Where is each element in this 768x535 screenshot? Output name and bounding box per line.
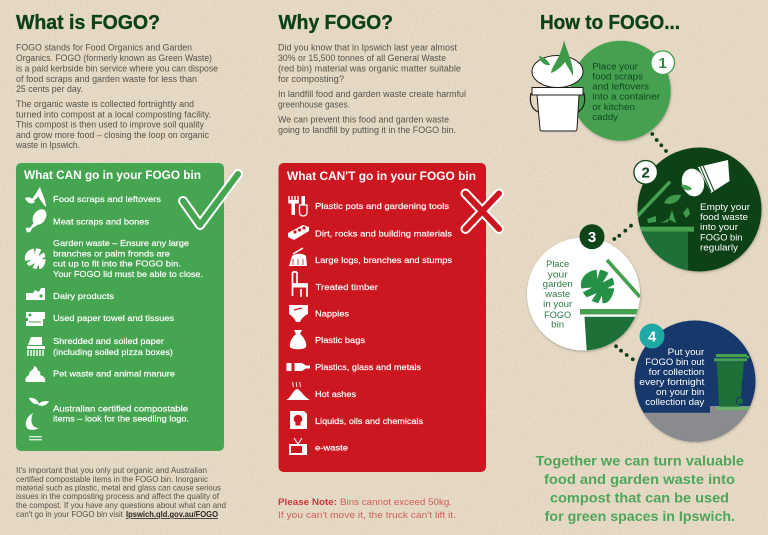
item: shredded paper: Shredded and soiled paper (53, 336, 164, 346)
item: e-waste (289, 438, 348, 455)
text block: Ipswich statistic: 30% or 15,500 tonnes of all General Waste (278, 53, 446, 63)
text block: Ipswich statistic: Did you know that in Ipswich last year almost (278, 42, 458, 52)
callout: please note: Bins cannot exceed 50kg. (340, 497, 452, 507)
text block: FOGO definition: 25 cents per day. (16, 84, 83, 94)
item: shredded paper: (including soiled pizza boxes) (53, 347, 173, 357)
heading: Why FOGO: Why FOGO? (278, 12, 393, 34)
icon: open bin with food falling (636, 182, 694, 274)
text block: prevention (278, 114, 456, 135)
item: pet waste (25, 366, 175, 382)
callout: please note (278, 497, 456, 520)
step 2 text: Empty your (700, 202, 750, 212)
item text: garden waste: branches or palm fronds are (53, 248, 170, 258)
item text: garden waste (53, 238, 203, 279)
text block: composting explanation: waste in Ipswich. (15, 140, 80, 150)
text block: important note with link: can't go in your FOGO bin visit (16, 510, 124, 519)
step 2 text: into your (700, 222, 738, 232)
item: dairy products: Dairy products (53, 291, 115, 301)
step 1 text: caddy (592, 112, 619, 122)
step 2 text: regularly (700, 242, 739, 252)
item: dirt, rocks, building materials: Dirt, rocks and building materials (315, 228, 453, 238)
step 1 text: into a container (592, 92, 660, 102)
step 4: put bin out for collection (630, 320, 760, 445)
icon: wheelie bin on kerb (644, 354, 750, 442)
column: What is FOGO (15, 12, 218, 150)
step 1: place food scraps in caddy (530, 40, 674, 141)
panel: what can go in your FOGO bin (16, 163, 238, 451)
callout: please note: Please Note: (278, 497, 337, 507)
step 3 text: in your (543, 299, 572, 309)
item: treated timber (292, 272, 378, 297)
item: food scraps (25, 187, 162, 207)
step 2 text: FOGO bin (700, 232, 742, 242)
step 1 text: or kitchen (592, 102, 635, 112)
step 3 text: garden (543, 279, 573, 289)
item: plastic bags: Plastic bags (315, 335, 366, 345)
item: plastic pots and tools (288, 196, 450, 216)
step 1 text: and leftovers (592, 82, 650, 92)
step 3 text: your (548, 270, 568, 280)
dotted connector 3 to 4 (614, 344, 635, 361)
text block: important note with link: issues in the composting process and affect the quality of (16, 492, 220, 501)
text block: greenhouse gases (278, 89, 466, 110)
item: e-waste: e-waste (315, 442, 348, 452)
closing message: food and garden waste into (544, 472, 735, 487)
text block: composting explanation: turned into compost at a local composting facility. (16, 110, 211, 120)
step 1 text (592, 62, 660, 122)
item text: garden waste: Your FOGO lid must be able to close. (53, 269, 203, 279)
step 3 text: waste (544, 289, 570, 299)
text block: composting explanation: This compost is then used to improve soil quality (16, 120, 205, 130)
text block: important note with link (16, 466, 226, 519)
item: food scraps: Food scraps and leftovers (53, 194, 162, 204)
closing message (536, 454, 744, 524)
item: compostable seedling logo: Australian certified compostable (53, 404, 188, 414)
icon: kitchen caddy with food (530, 40, 585, 131)
item: compostable seedling logo (26, 398, 189, 440)
item: plastic bags (290, 330, 366, 349)
step 3 text: Place (546, 259, 569, 269)
item: liquids, oils, chemicals (290, 411, 424, 429)
step 2: empty food waste into bin (634, 148, 762, 274)
item: garden waste icon (22, 244, 50, 273)
icon: large tick (183, 174, 238, 225)
text block: FOGO definition: is a paid kerbside bin service where you can dispose (16, 64, 218, 74)
dotted connector 1 to 2 (650, 132, 668, 153)
item: meat scraps (26, 207, 150, 232)
item: dirt, rocks, building materials (288, 225, 453, 240)
step 4 text: every fortnight (639, 377, 705, 387)
panel: what can't go in your FOGO bin (278, 163, 499, 472)
badge: number 1: 1 (659, 55, 667, 72)
item text: garden waste: Garden waste – Ensure any large (53, 238, 189, 248)
item: paper towel (26, 312, 175, 326)
item: nappies (289, 305, 350, 322)
text block: FOGO definition: Organics. FOGO (formerly known as Green Waste) (16, 53, 212, 63)
step 4 text: on your bin (656, 387, 704, 397)
icon: large cross (466, 194, 499, 229)
item: liquids, oils, chemicals: Liquids, oils and chemicals (315, 416, 424, 426)
step 4 text: for collection (649, 367, 704, 377)
text block: FOGO definition: of food scraps and garden waste for less than (16, 74, 197, 84)
step 3 text (543, 259, 573, 330)
item: dairy products (26, 288, 115, 301)
heading: How to FOGO: How to FOGO... (540, 12, 680, 34)
text block: composting explanation: The organic waste is collected fortnightly and (16, 99, 194, 109)
item: pet waste: Pet waste and animal manure (53, 368, 175, 378)
step 3 text: bin (551, 320, 564, 330)
text block: composting explanation (15, 99, 211, 150)
text block: important note with link: certified compostable items in the FOGO bin. Inorganic (16, 475, 208, 484)
dotted connector 2 to 3 (612, 224, 633, 241)
item: hot ashes: Hot ashes (315, 389, 357, 399)
item: meat scraps: Meat scraps and bones (53, 216, 150, 226)
item: large logs (289, 248, 453, 266)
text block: prevention: We can prevent this food and garden waste (278, 114, 449, 124)
panel heading: what can't go: What CAN'T go in your FOGO bin (287, 169, 476, 183)
step 4 text (639, 347, 705, 407)
badge: number 3: 3 (588, 229, 596, 246)
step 2 text: food waste (700, 212, 748, 222)
text block: Ipswich statistic: (red bin) material was organic matter suitable (278, 64, 461, 74)
text block: prevention: going to landfill by putting it in the FOGO bin. (278, 125, 456, 135)
step 3 text: FOGO (544, 310, 571, 320)
callout: please note: If you can't move it, the truck can't lift it. (278, 510, 456, 520)
text block: important note with link: Ipswich.qld.gov.au/FOGO (126, 510, 219, 519)
text block: FOGO definition (16, 42, 218, 94)
closing message: for green spaces in Ipswich. (545, 509, 735, 524)
text block: Ipswich statistic (278, 42, 461, 84)
item: nappies: Nappies (315, 308, 350, 318)
step 1 text: food scraps (592, 72, 644, 82)
text block: important note with link: material such as plastic, metal and glass can cause serious (16, 484, 221, 492)
icon: bin with monstera leaf (580, 258, 640, 350)
item: large logs: Large logs, branches and stumps (315, 255, 453, 265)
closing message: compost that can be used (550, 490, 729, 505)
item: shredded paper (27, 336, 173, 357)
text block: composting explanation: and grow more food – closing the loop on organic (16, 130, 210, 140)
text block: important note with link: It's important that you only put organic and Australian (16, 466, 207, 475)
panel heading: what can go: What CAN go in your FOGO bin (24, 168, 201, 182)
step 2 text (700, 202, 750, 252)
item: hot ashes (286, 382, 357, 400)
step 4 text: FOGO bin out (645, 357, 705, 367)
heading: What is FOGO: What is FOGO? (16, 12, 160, 34)
item: plastic pots and tools: Plastic pots and gardening tools (315, 201, 450, 211)
column: Why FOGO (278, 12, 466, 135)
badge: number 4: 4 (648, 328, 657, 345)
badge: number 2: 2 (642, 165, 650, 182)
item text: garden waste: cut up to fit into the FOGO bin. (53, 258, 181, 268)
icon: tipped caddy (679, 160, 730, 199)
item: plastics, glass, metals: Plastics, glass and metals (315, 362, 422, 372)
badge: number 1 (651, 51, 674, 74)
text block: Ipswich statistic: for composting? (278, 74, 344, 84)
item: treated timber: Treated timber (316, 282, 378, 292)
text block: greenhouse gases: greenhouse gases. (278, 100, 350, 110)
text block: greenhouse gases: In landfill food and garden waste create harmful (278, 89, 466, 99)
text block: FOGO definition: FOGO stands for Food Organics and Garden (16, 42, 192, 52)
step 1 text: Place your (592, 62, 638, 72)
item: compostable seedling logo: items – look for the seedling logo. (53, 414, 189, 424)
step 4 text: Put your (668, 347, 704, 357)
item: paper towel: Used paper towel and tissues (53, 313, 175, 323)
text block: important note with link: the compost. If you have any questions about what can and (16, 501, 226, 510)
step 3: place garden waste in bin (527, 224, 645, 355)
closing message: Together we can turn valuable (536, 454, 744, 468)
step 4 text: collection day (645, 397, 705, 407)
